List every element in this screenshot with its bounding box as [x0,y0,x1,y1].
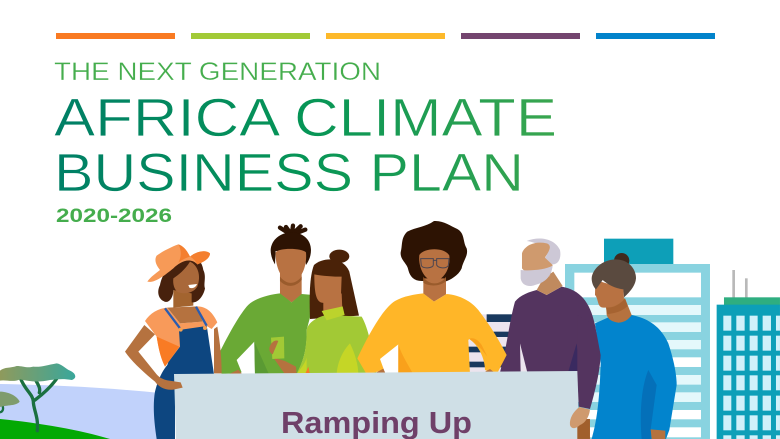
building: teal tower [717,270,780,439]
acacia trees [0,363,75,431]
building: striped [468,314,527,374]
colour bars [56,33,715,39]
person: older man in purple, torso and head [500,239,600,375]
person: man in green sweater [220,226,313,374]
person: farmer arm on sign [125,325,183,390]
person: farmer body [145,257,222,439]
title block: 2020-2026 [56,206,172,227]
sign panel [174,371,578,439]
title block: AFRICA CLIMATE [54,88,557,148]
title block: BUSINESS PLAN [54,143,524,203]
landscape: hills [0,384,160,439]
person: woman in blue [592,253,677,439]
title block: THE NEXT GENERATION [54,58,381,86]
sign heading: Ramping Up [281,405,472,439]
person: woman in lime green [297,250,377,374]
title block [54,58,557,227]
person: person in yellow sweater [357,221,507,374]
icon: farmer hat [147,244,210,282]
person: older man arm and hand on sign [570,315,601,439]
building: light blue tower [565,239,710,439]
